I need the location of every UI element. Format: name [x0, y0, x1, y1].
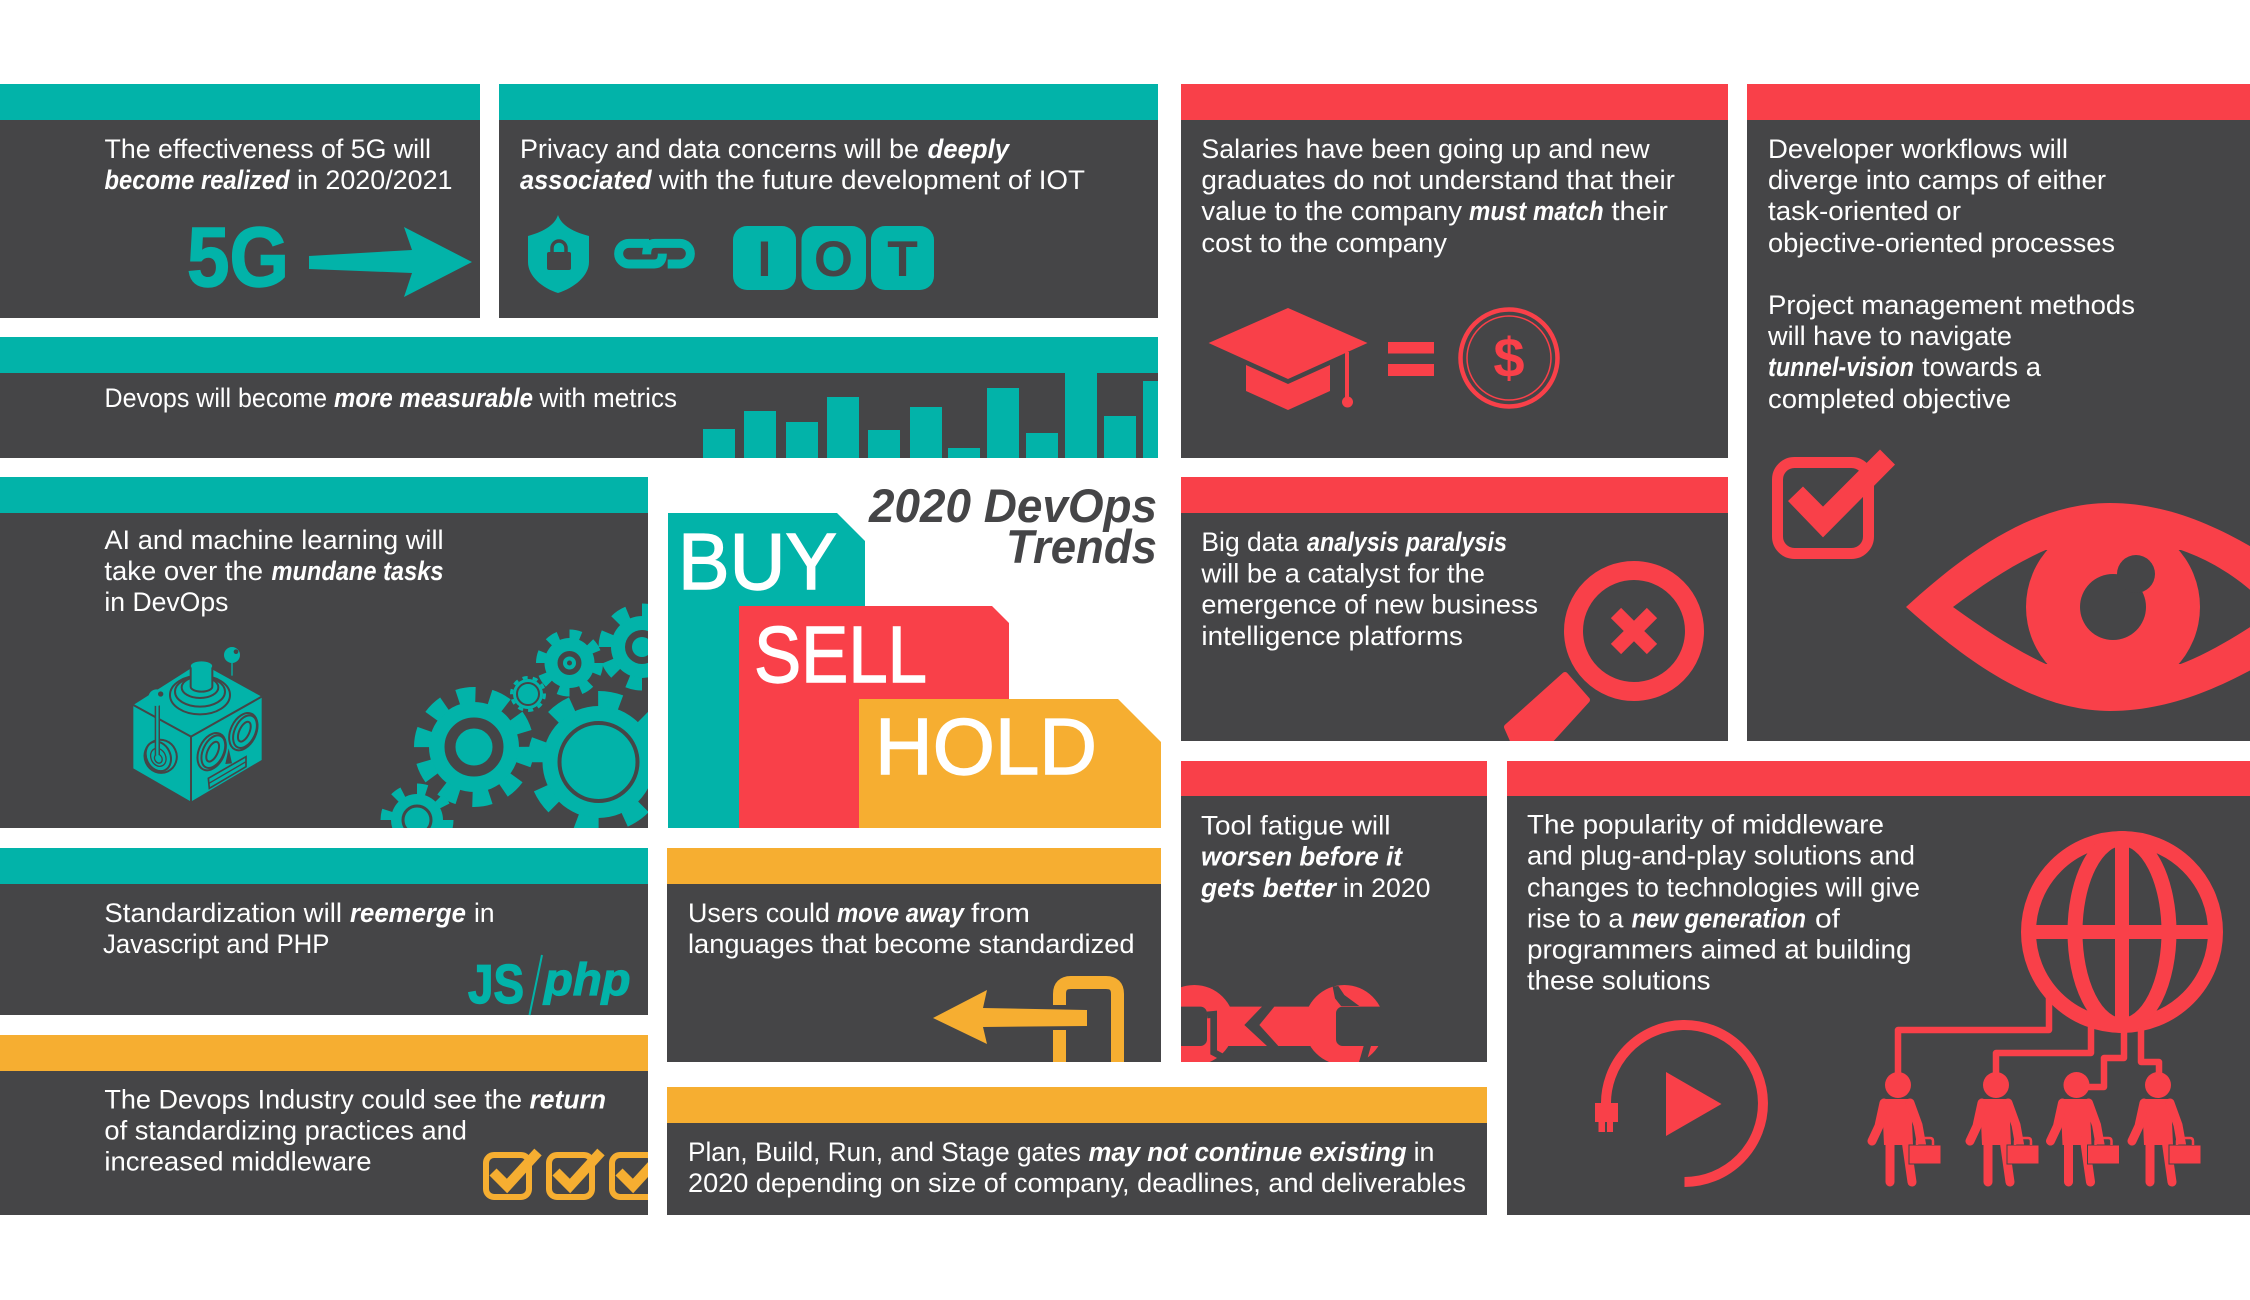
icon: person 1 with briefcase [1872, 1072, 1941, 1182]
text: middleware statement: new generation [1632, 904, 1806, 934]
icon: dollar coin: $ [1493, 326, 1525, 389]
icon: checkbox [1778, 450, 1895, 554]
text: AI statement: in DevOps [104, 587, 228, 617]
panel: move away from languages [667, 848, 1161, 1070]
text: gates statement: Plan, Build, Run, and Stage gates [688, 1137, 1081, 1167]
text: salaries statement: value to the company [1201, 196, 1463, 226]
text: tool fatigue statement: Tool fatigue will [1201, 810, 1390, 840]
text: big data statement: will be a catalyst for the [1200, 558, 1485, 588]
icon: globe [2028, 838, 2216, 1026]
icon: robot [133, 647, 263, 802]
text: move away statement: from [971, 898, 1030, 928]
icon: IOT blocks: I [758, 231, 771, 287]
text: AI statement [104, 525, 444, 617]
icon: chain link [619, 243, 690, 264]
icon: JS and php logos [468, 953, 630, 1015]
text: metrics statement: with metrics [539, 383, 677, 413]
icon: person 3 with briefcase [2050, 1072, 2120, 1182]
text: middleware statement: rise to a [1527, 904, 1624, 934]
text: salaries statement: their [1611, 196, 1668, 226]
icon: 5G label: 5G [187, 210, 289, 304]
title: 2020 DevOps [868, 479, 1157, 532]
text: gates statement: in [1414, 1137, 1434, 1167]
text: move away statement: languages that become standardized [688, 929, 1134, 959]
text: standardization statement: in [474, 898, 494, 928]
text: middleware statement: these solutions [1527, 966, 1710, 996]
text: big data statement: Big data [1201, 527, 1299, 557]
text: privacy statement [520, 134, 1085, 195]
icon: person 4 with briefcase [2132, 1072, 2201, 1182]
icon: IOT blocks: O [814, 231, 853, 287]
panel: big data [1181, 477, 1728, 745]
title [868, 479, 1157, 573]
text: tool fatigue statement: gets better [1200, 873, 1338, 903]
text: 5G statement [104, 134, 452, 195]
text: salaries statement: must match [1469, 196, 1604, 226]
text: workflows statement: objective-oriented processes [1768, 228, 2115, 258]
panel: developer workflows [1747, 84, 2250, 741]
text: return statement: of standardizing practices and [104, 1116, 467, 1146]
text: return statement: The Devops Industry could see the [104, 1084, 522, 1114]
icon: exit door with arrow [933, 982, 1118, 1070]
text: gates statement [688, 1137, 1466, 1198]
icon: IOT blocks [733, 226, 934, 290]
text: workflows statement: Project management methods [1768, 290, 2135, 320]
text: move away statement [688, 898, 1134, 959]
label: BUY: BUY [678, 517, 837, 606]
text: workflows statement: completed objective [1768, 384, 2011, 414]
text: workflows statement: will have to navigate [1767, 321, 2012, 351]
text: 5G statement: The effectiveness of 5G will [104, 134, 431, 164]
text: move away statement: Users could [688, 898, 830, 928]
text: big data statement: emergence of new business [1201, 590, 1538, 620]
text: tool fatigue statement [1200, 810, 1430, 903]
text: workflows statement: towards a [1922, 352, 2041, 382]
text: AI statement: mundane tasks [272, 556, 444, 586]
text: salaries statement [1201, 134, 1675, 258]
text: big data statement: analysis paralysis [1307, 527, 1507, 557]
text: gates statement: may not continue existing [1088, 1137, 1407, 1167]
text: privacy statement: associated [520, 165, 652, 195]
icon: gears [380, 604, 648, 828]
panel: 5G [0, 84, 480, 318]
icon: magnifier with cross [1507, 570, 1694, 745]
text: return statement: return [530, 1084, 606, 1114]
panel: AI and machine learning [0, 477, 648, 828]
text: tool fatigue statement: worsen before it [1201, 842, 1403, 872]
text: workflows statement [1767, 134, 2135, 414]
text: standardization statement: Standardization will [104, 898, 342, 928]
text: standardization statement: reemerge [350, 898, 466, 928]
text: standardization statement [103, 898, 494, 959]
text: middleware statement: of [1815, 904, 1841, 934]
text: metrics statement: more measurable [334, 383, 533, 413]
text: middleware statement: The popularity of middleware [1527, 810, 1884, 840]
panel: salaries [1181, 84, 1728, 458]
panel: gates [667, 1087, 1487, 1215]
text: standardization statement: Javascript and PHP [103, 929, 330, 959]
text: privacy statement: deeply [928, 134, 1010, 164]
text: 5G statement: become realized [104, 165, 290, 195]
panel: tool fatigue [1154, 761, 1487, 1065]
panel: middleware [1507, 761, 2250, 1215]
icon: arrow right [309, 227, 472, 297]
icon: wrench [1181, 985, 1380, 1062]
icon: equals sign [1388, 342, 1434, 376]
icon: JS and php logos: JS [468, 953, 524, 1015]
text: 5G statement: in 2020/2021 [297, 165, 452, 195]
panel: return of standardizing practices [0, 1035, 664, 1215]
icon: shield with lock [528, 215, 589, 293]
text: middleware statement: programmers aimed at building [1527, 935, 1912, 965]
text: salaries statement: cost to the company [1201, 228, 1448, 258]
text: big data statement [1200, 527, 1538, 651]
text: workflows statement: diverge into camps of either [1768, 165, 2106, 195]
icon: eye [1906, 503, 2250, 711]
panel: standardization [0, 848, 648, 1015]
text: middleware statement: changes to technologies will give [1527, 872, 1920, 902]
icon: three checkboxes [486, 1152, 664, 1197]
bar chart [703, 373, 1158, 458]
text: big data statement: intelligence platforms [1201, 621, 1463, 651]
icon: JS and php logos: php [543, 954, 630, 1005]
network wires [1898, 997, 2159, 1087]
text: middleware statement: and plug-and-play solutions and [1527, 841, 1915, 871]
text: privacy statement: Privacy and data concerns will be [520, 134, 919, 164]
text: move away statement: move away [837, 898, 965, 928]
icon: plug and play [1595, 1025, 1763, 1182]
text: workflows statement: task-oriented or [1768, 196, 1961, 226]
text: AI statement: take over the [104, 556, 263, 586]
label: SELL: SELL [754, 610, 927, 699]
text: tool fatigue statement: in 2020 [1343, 873, 1430, 903]
icon: person 2 with briefcase [1970, 1072, 2039, 1182]
text: workflows statement: Developer workflows will [1768, 134, 2068, 164]
text: return statement: increased middleware [104, 1146, 372, 1176]
text: salaries statement: graduates do not understand that their [1201, 165, 1675, 195]
panel: Buy Sell Hold [668, 513, 1161, 828]
text: return statement [104, 1084, 606, 1176]
text: gates statement: 2020 depending on size of company, deadlines, and deliverables [688, 1168, 1466, 1198]
text: AI statement: AI and machine learning will [104, 525, 444, 555]
icon: dollar coin [1460, 310, 1558, 406]
text: metrics statement [104, 383, 677, 413]
panel: privacy and IOT [499, 84, 1158, 318]
icon: graduation cap [1209, 308, 1368, 410]
text: workflows statement: tunnel-vision [1768, 352, 1914, 382]
text: privacy statement: with the future development of IOT [658, 165, 1085, 195]
icon: IOT blocks: T [887, 231, 918, 287]
text: middleware statement [1527, 810, 1920, 996]
label: HOLD: HOLD [875, 702, 1097, 791]
text: salaries statement: Salaries have been going up and new [1201, 134, 1650, 164]
text: metrics statement: Devops will become [104, 383, 327, 413]
title: Trends [1006, 520, 1157, 573]
panel: metrics [0, 337, 1158, 458]
